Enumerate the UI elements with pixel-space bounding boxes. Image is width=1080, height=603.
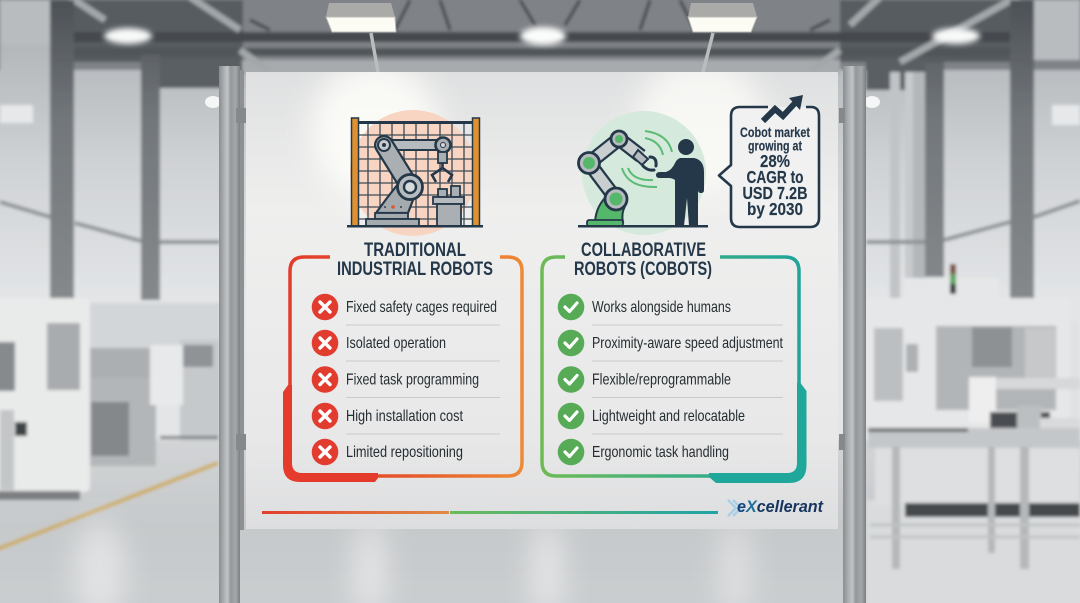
pillars <box>50 0 74 300</box>
sign post: left <box>219 66 246 603</box>
row: high installation cost: High installation cost <box>346 408 463 425</box>
horizontal arm <box>385 139 443 151</box>
right machine <box>905 278 998 300</box>
row: proximity-aware speed adjustment <box>558 330 783 356</box>
yellow floor line <box>0 463 218 550</box>
left far machines <box>85 303 220 363</box>
callout text: Cobot market <box>740 125 810 140</box>
heading: collaborative robots <box>574 239 712 280</box>
walls <box>0 45 50 300</box>
upper arm <box>384 145 410 187</box>
icon: traditional robot in safety cage <box>347 110 483 236</box>
callout text: 28% <box>760 151 790 171</box>
callout text: CAGR to <box>746 167 804 187</box>
callout text: USD 7.2B <box>742 183 808 203</box>
pedestal <box>376 184 413 213</box>
sign board <box>246 55 838 529</box>
beams <box>0 201 1080 242</box>
heading: collaborative robots: ROBOTS (COBOTS) <box>574 258 712 280</box>
row: high installation cost <box>312 403 463 429</box>
sign post: right <box>839 66 866 603</box>
row: ergonomic task handling <box>558 439 729 465</box>
row: lightweight and relocatable <box>558 403 745 429</box>
row: isolated operation <box>312 330 446 356</box>
row: fixed safety cages <box>312 294 497 320</box>
row: limited repositioning: Limited repositioning <box>346 444 463 461</box>
icon: growth arrow <box>763 102 796 121</box>
ceiling <box>0 0 1080 70</box>
row: fixed task programming <box>312 366 479 393</box>
left machine <box>0 298 90 492</box>
row: ergonomic task handling: Ergonomic task handling <box>592 444 729 461</box>
row: lightweight and relocatable: Lightweight and relocatable <box>592 408 745 425</box>
row: limited repositioning <box>312 439 463 465</box>
callout text: by 2030 <box>747 199 803 219</box>
heading: collaborative robots: COLLABORATIVE <box>581 239 706 261</box>
row: proximity-aware speed adjustment: Proximity-aware speed adjustment <box>592 335 783 352</box>
workstation <box>438 189 447 197</box>
callout text <box>740 125 810 219</box>
ceiling lights <box>104 3 980 108</box>
row: works alongside humans <box>558 294 731 320</box>
footer rule <box>262 511 718 514</box>
panel: traditional robots <box>283 257 522 482</box>
logo: eXcellerant: eXcellerant <box>737 497 824 516</box>
row: isolated operation: Isolated operation <box>346 335 446 352</box>
row: works alongside humans: Works alongside humans <box>592 299 731 316</box>
row: flexible reprogrammable <box>558 366 731 393</box>
panel: collaborative robots <box>542 257 806 483</box>
heading: traditional industrial robots <box>337 239 493 280</box>
floor <box>0 440 1080 603</box>
callout text: growing at <box>748 138 802 154</box>
row: fixed safety cages: Fixed safety cages required <box>346 299 497 316</box>
icon: cobot with worker <box>578 111 708 235</box>
row: fixed task programming: Fixed task programming <box>346 372 479 388</box>
row: flexible reprogrammable: Flexible/reprogrammable <box>592 372 731 388</box>
floor reflections <box>75 520 751 603</box>
heading: traditional industrial robots: INDUSTRIAL ROBOTS <box>337 258 493 280</box>
callout: cobot market growth <box>719 95 819 227</box>
heading: traditional industrial robots: TRADITIONAL <box>364 239 466 261</box>
